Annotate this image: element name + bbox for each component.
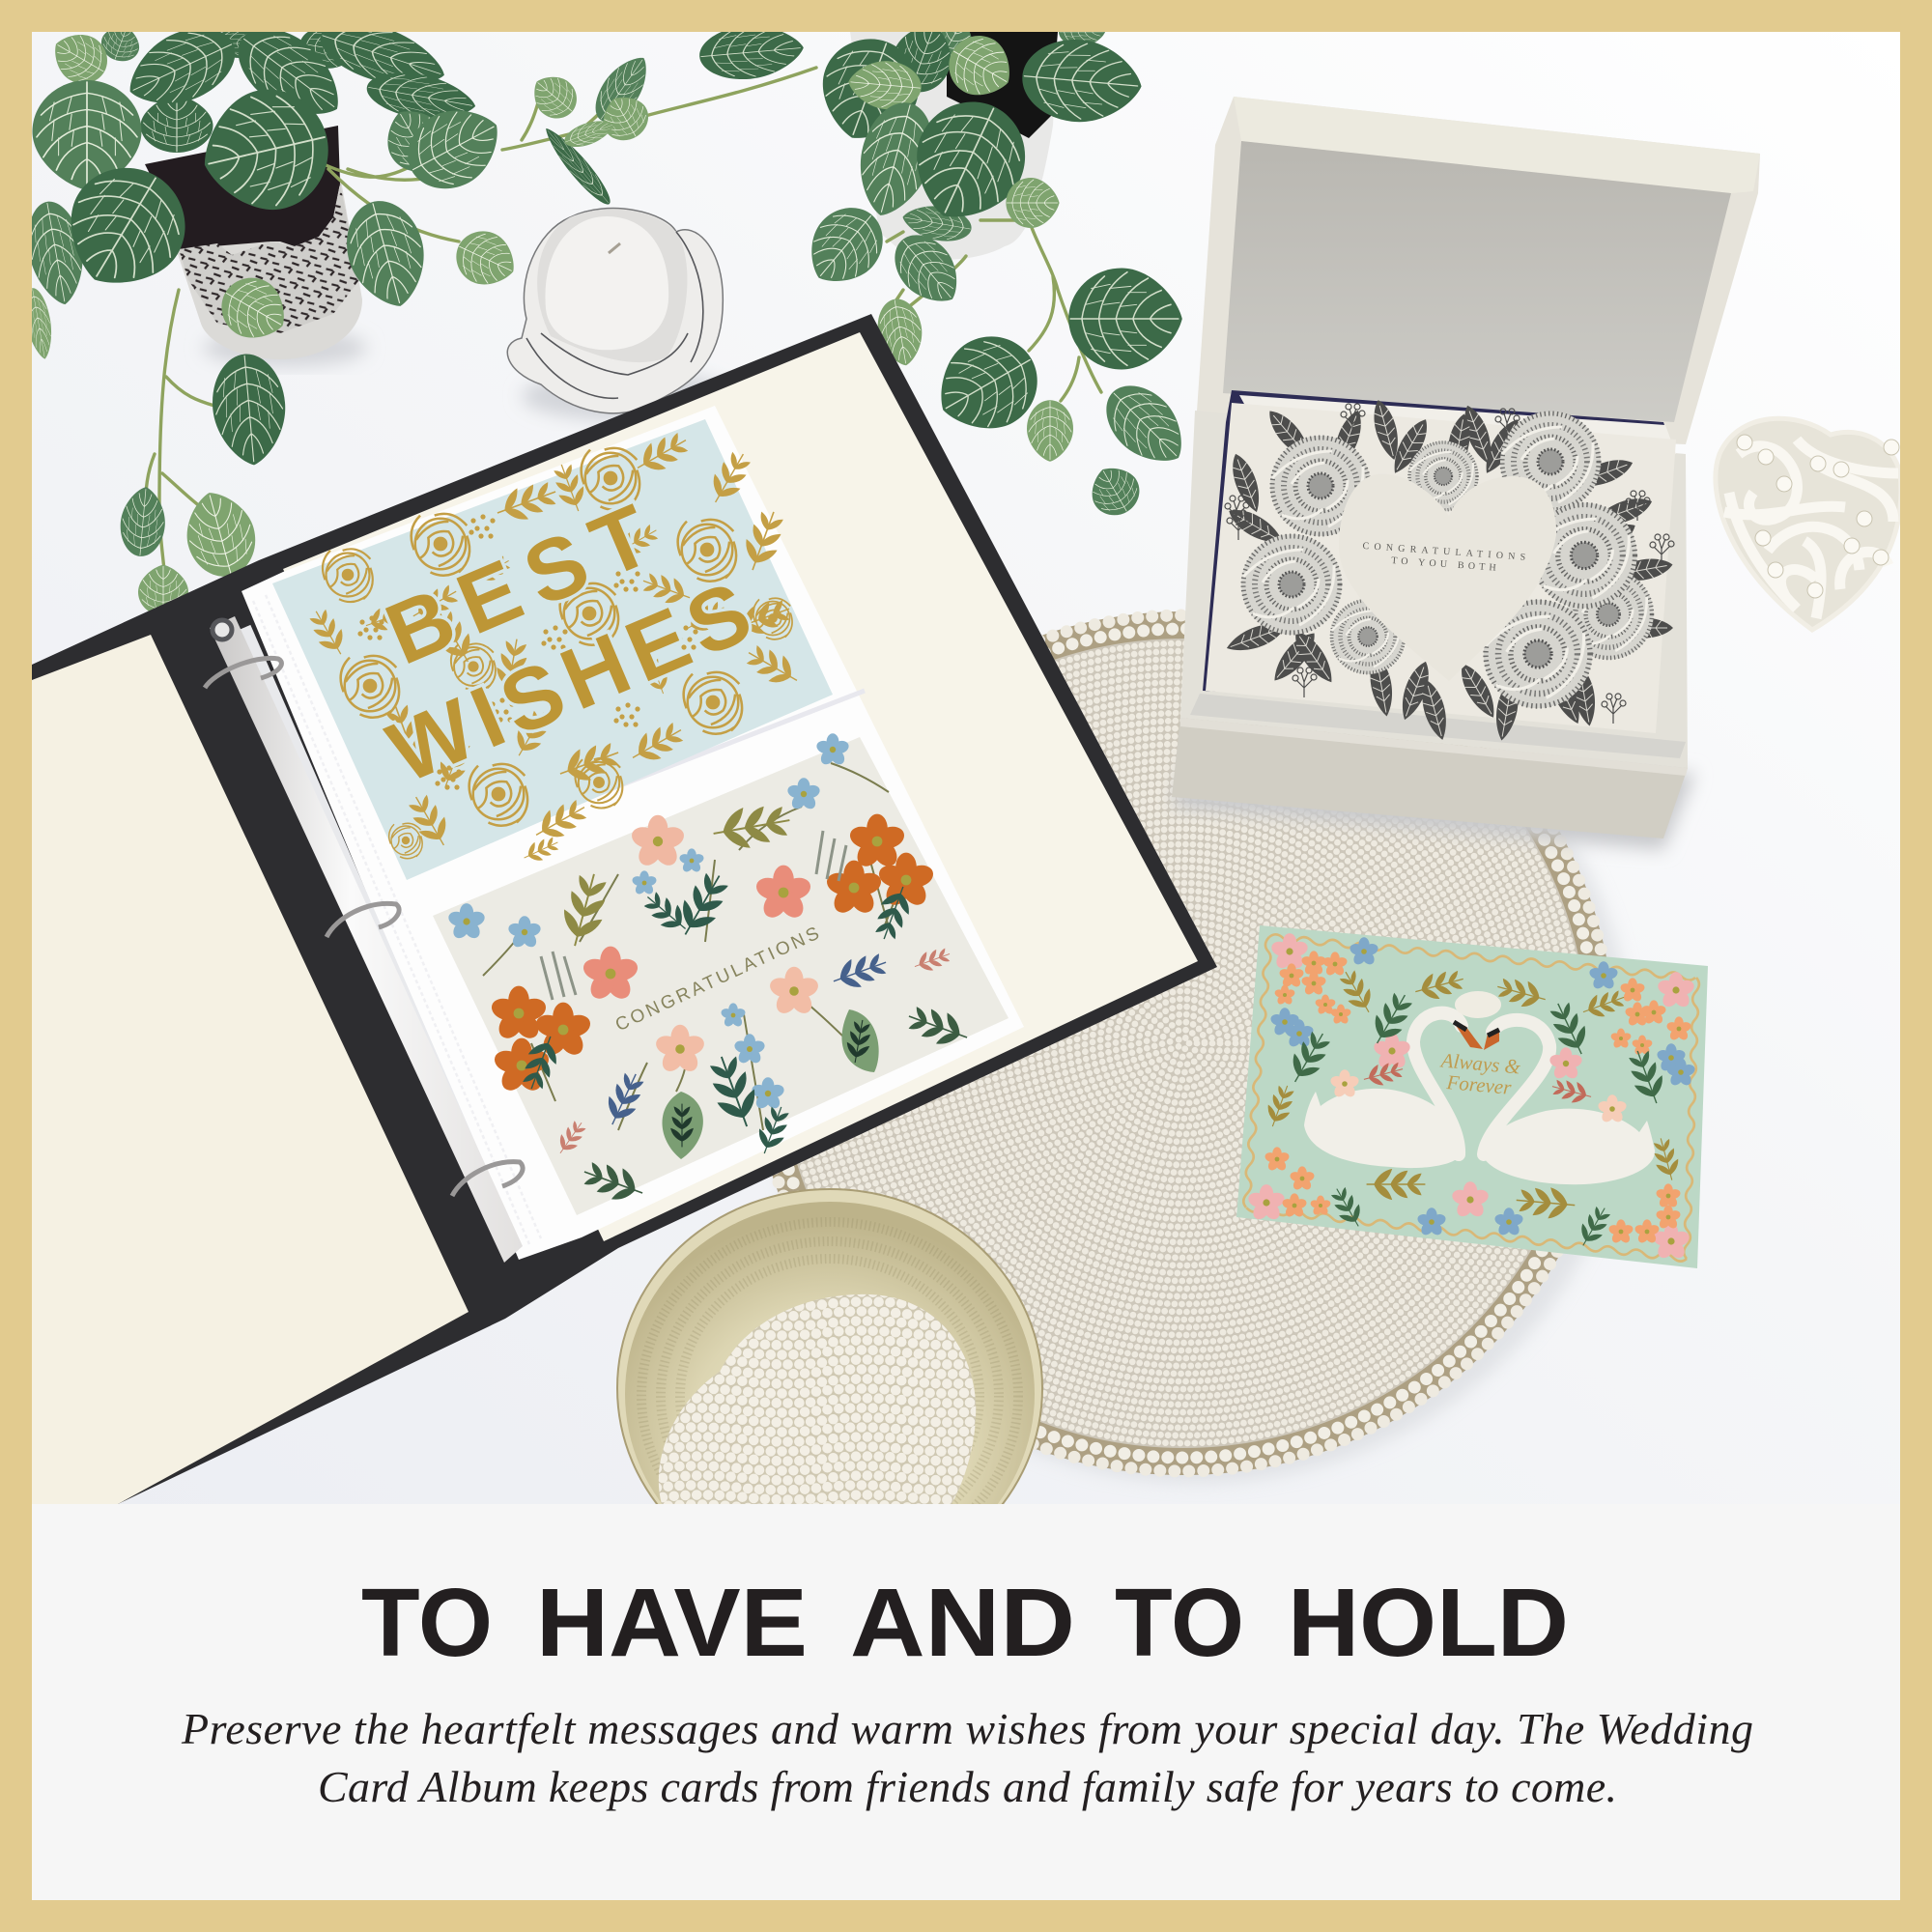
description	[181, 1704, 1753, 1811]
left plant pot	[145, 126, 367, 367]
description: Preserve the heartfelt messages and warm wishes from your special day. The Wedding	[181, 1704, 1753, 1753]
plant stems	[146, 68, 1101, 570]
plastic sleeve	[242, 406, 1024, 1260]
heart ornament with pearls	[1716, 418, 1901, 630]
middle ring	[327, 903, 399, 937]
right inside page	[283, 332, 1198, 1241]
binder cover	[32, 314, 1217, 1504]
leaf group: back layer	[20, 10, 525, 615]
gold floral pattern	[304, 427, 805, 867]
swan card lettering: Always &	[1438, 1048, 1522, 1079]
title: HOLD	[1288, 1569, 1569, 1677]
trailing vine leaves	[534, 32, 804, 205]
box base front	[1172, 718, 1688, 838]
floral decorations	[1246, 933, 1696, 1261]
card: congratulations to you both	[1206, 397, 1676, 743]
title: HAVE	[536, 1569, 808, 1677]
left inside page	[32, 635, 469, 1504]
keepsake box	[1172, 97, 1760, 850]
bottom ring	[452, 1162, 523, 1196]
card lettering: BEST	[373, 487, 665, 684]
swans	[1304, 1089, 1655, 1184]
description: Card Album keeps cards from friends and family safe for years to come.	[318, 1762, 1617, 1811]
placemat: beaded round mat	[752, 611, 1633, 1483]
box lid	[1196, 97, 1760, 444]
title	[361, 1569, 1569, 1677]
card greeting: CONGRATULATIONS	[1362, 541, 1531, 563]
congratulations lettering: CONGRATULATIONS	[612, 923, 822, 1036]
caption panel	[32, 1504, 1900, 1900]
card greeting: TO YOU BOTH	[1391, 555, 1500, 574]
tabletop background	[32, 32, 1900, 1504]
box base rim	[1180, 411, 1688, 768]
title: TO	[1115, 1569, 1244, 1677]
top ring	[205, 620, 281, 688]
card: best wishes	[272, 419, 833, 880]
right plant pot	[850, 32, 1058, 260]
heart cut-out	[1339, 474, 1556, 681]
open card binder	[32, 314, 1217, 1504]
card: congratulations florals	[433, 733, 1009, 1215]
metal ring bar	[210, 616, 523, 1263]
right plant leaves	[811, 32, 1182, 516]
left plant leaves	[20, 10, 525, 615]
swan card lettering: Forever	[1445, 1070, 1513, 1099]
title: AND	[850, 1569, 1075, 1677]
card greeting	[1363, 543, 1524, 571]
brass bowl with pearls	[617, 1189, 1042, 1587]
photo panel	[20, 9, 1901, 1587]
pearl strands	[647, 1285, 995, 1509]
candle in ceramic rose	[507, 209, 734, 421]
card lettering: WISHES	[376, 564, 764, 802]
title: TO	[361, 1569, 493, 1677]
card: always and forever swans	[1236, 925, 1708, 1268]
swan card lettering	[1436, 1048, 1522, 1100]
scalloped gold border	[1243, 934, 1699, 1262]
